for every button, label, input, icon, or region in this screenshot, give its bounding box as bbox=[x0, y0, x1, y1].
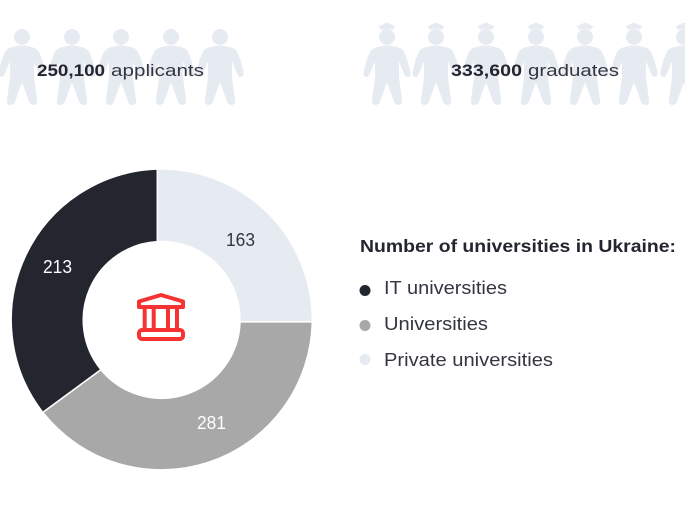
donut chart bbox=[11, 169, 312, 470]
legend title: Number of universities in Ukraine: bbox=[360, 236, 676, 256]
applicants stat bbox=[0, 29, 243, 104]
slice: IT universities 213 bbox=[11, 169, 157, 412]
applicants label: 250,100 bbox=[37, 61, 105, 80]
legend item: IT universities: IT universities bbox=[384, 278, 507, 298]
graduates stat bbox=[364, 22, 685, 104]
slice: private universities 163 bbox=[157, 169, 312, 322]
value: 163: 163 bbox=[226, 230, 255, 250]
value: 281: 281 bbox=[197, 413, 226, 433]
graduates label: 333,600 bbox=[451, 61, 522, 80]
value: 213: 213 bbox=[43, 257, 72, 277]
legend item: Universities: Universities bbox=[384, 314, 488, 334]
icon: row of graduates bbox=[364, 22, 685, 104]
graduates label: graduates bbox=[528, 61, 619, 80]
slice: universities 281 bbox=[43, 322, 312, 470]
legend bbox=[360, 236, 676, 370]
icon: row of people bbox=[0, 29, 243, 104]
graduates label bbox=[451, 61, 619, 80]
applicants label: applicants bbox=[111, 61, 204, 80]
legend item: Private universities: Private universities bbox=[384, 350, 553, 370]
applicants label bbox=[37, 61, 204, 80]
icon: university building bbox=[139, 295, 183, 339]
